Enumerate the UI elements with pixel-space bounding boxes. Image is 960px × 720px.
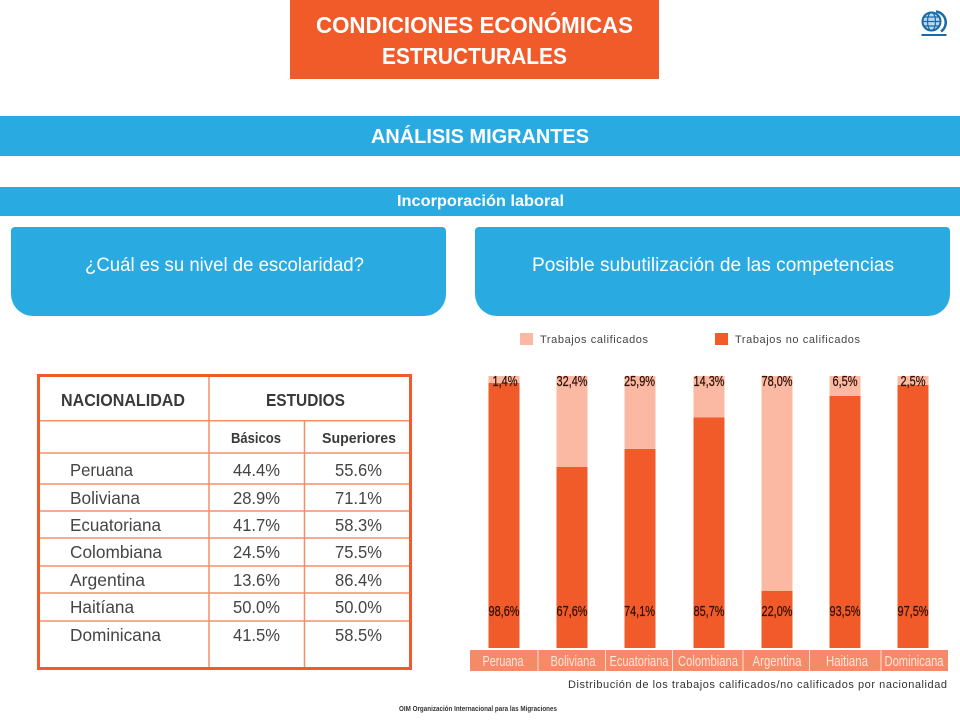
chart axis labels: Argentina [752, 654, 802, 670]
panel: nivel de escolaridad: ¿Cuál es su nivel de escolaridad? [85, 255, 364, 276]
table rows: Dominicana [70, 625, 161, 645]
bar: Argentina [762, 374, 793, 648]
subsection banner: incorporación laboral [0, 187, 960, 216]
bar: Peruana: 98,6% [488, 604, 520, 620]
chart axis labels: Haitiana [826, 654, 869, 670]
panel: subutilización de competencias [475, 227, 950, 316]
chart legend [520, 333, 860, 346]
table rows: 28.9% [233, 488, 280, 508]
bar: Dominicana [898, 374, 929, 648]
bar: Colombiana [694, 374, 725, 648]
section banner: análisis migrantes [0, 116, 960, 156]
table rows: Ecuatoriana [70, 515, 161, 535]
title: ESTRUCTURALES [382, 43, 567, 69]
chart axis labels: Boliviana [550, 654, 596, 670]
table rows [70, 460, 382, 645]
title [290, 0, 659, 79]
table rows: 86.4% [335, 570, 382, 590]
table header: NACIONALIDAD [61, 390, 185, 410]
table rows: 41.7% [233, 515, 280, 535]
bar: Boliviana: 32,4% [556, 374, 588, 390]
chart axis labels: Colombiana [678, 654, 739, 670]
chart axis labels [470, 650, 948, 671]
bar: Ecuatoriana: 74,1% [624, 604, 655, 620]
table rows: Argentina [70, 570, 145, 590]
table header [61, 390, 396, 447]
bar: Boliviana: 67,6% [556, 604, 588, 620]
table rows: 71.1% [335, 488, 382, 508]
chart legend: Trabajos no calificados [735, 334, 860, 346]
stacked bar chart [488, 374, 929, 648]
table rows: Colombiana [70, 542, 162, 562]
chart caption: Distribución de los trabajos calificados/no calificados por nacionalidad [568, 679, 947, 691]
table rows: 41.5% [233, 625, 280, 645]
table rows: 13.6% [233, 570, 280, 590]
table rows: 24.5% [233, 542, 280, 562]
bar: Haitiana: 93,5% [830, 604, 861, 620]
table rows: 50.0% [335, 597, 382, 617]
table rows: 50.0% [233, 597, 280, 617]
bar: Peruana [488, 374, 520, 648]
chart axis labels: Dominicana [884, 654, 944, 670]
table rows: 44.4% [233, 460, 280, 480]
table rows: 58.3% [335, 515, 382, 535]
bar: Boliviana [556, 374, 588, 648]
bar: Ecuatoriana: 25,9% [624, 374, 655, 390]
icon: OIM logo [922, 12, 946, 35]
bar: Colombiana: 85,7% [694, 604, 725, 620]
panel: subutilización de competencias: Posible subutilización de las competencias [532, 255, 894, 276]
table rows: Peruana [70, 460, 133, 480]
footer: OIM Organización Internacional para las Migraciones [399, 706, 557, 713]
table rows: Haitíana [70, 597, 134, 617]
table rows: Boliviana [70, 488, 140, 508]
bar: Haitiana [830, 374, 861, 648]
bar: Ecuatoriana [624, 374, 656, 648]
table header: Básicos [231, 430, 281, 447]
bar: Argentina: 22,0% [762, 604, 793, 620]
bar: Dominicana: 97,5% [898, 604, 929, 620]
chart axis labels: Peruana [482, 654, 524, 670]
table rows: 75.5% [335, 542, 382, 562]
education table [38, 376, 410, 668]
bar: Colombiana: 14,3% [694, 374, 725, 390]
bar: Peruana: 1,4% [492, 374, 518, 390]
chart axis labels: Ecuatoriana [610, 654, 669, 670]
panel: nivel de escolaridad [11, 227, 446, 316]
table header: Superiores [322, 430, 396, 447]
section banner: análisis migrantes: ANÁLISIS MIGRANTES [371, 125, 589, 148]
subsection banner: incorporación laboral: Incorporación laboral [397, 193, 564, 210]
bar: Haitiana: 6,5% [832, 374, 858, 390]
table header: ESTUDIOS [266, 390, 345, 410]
title: CONDICIONES ECONÓMICAS [316, 11, 633, 38]
chart legend: Trabajos calificados [540, 334, 648, 346]
table rows: 58.5% [335, 625, 382, 645]
bar: Dominicana: 2,5% [900, 374, 926, 390]
bar: Argentina: 78,0% [762, 374, 793, 390]
table rows: 55.6% [335, 460, 382, 480]
